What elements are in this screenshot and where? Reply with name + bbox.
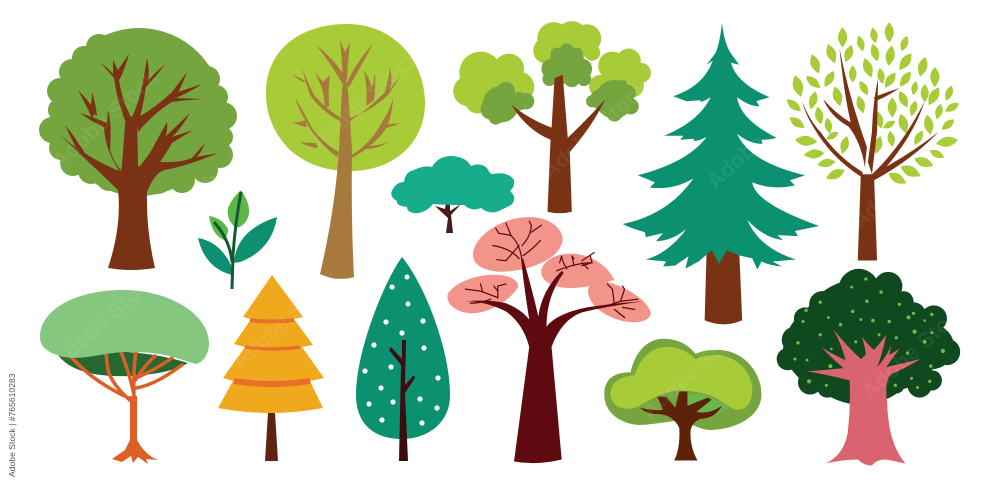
- icon: leafy sprig: [198, 190, 277, 289]
- shrub outer foliage: [604, 339, 761, 430]
- white dots: [362, 274, 441, 426]
- dark foliage: [481, 43, 639, 125]
- tree: teal bush tree: [391, 156, 514, 233]
- sprig leaves: [198, 190, 277, 275]
- golden foliage tiers: [218, 275, 324, 413]
- group: upper right trees, scaled: [453, 21, 961, 324]
- watermark text: Adobe Stock: [702, 85, 819, 194]
- acacia branches: [72, 352, 182, 464]
- shrub green hollow: [683, 394, 729, 415]
- teardrop trunk: [389, 340, 415, 461]
- tier bands: [234, 320, 310, 384]
- oak trunk and branches: [60, 54, 218, 270]
- oak canopy: [39, 28, 237, 196]
- tree: round lime tree: [266, 24, 425, 279]
- watermark text: Adobe Stock: [847, 125, 964, 234]
- shrub trunk: [640, 392, 722, 460]
- watermark text: Adobe Stock: [307, 45, 424, 154]
- tree: teal teardrop tree: [356, 257, 450, 461]
- dark foliage: [777, 269, 960, 405]
- watermark text: Adobe Stock: [537, 75, 654, 184]
- watermark text: Adobe Stock: [637, 315, 754, 424]
- lime dots: [793, 277, 945, 389]
- watermark text: [47, 45, 974, 424]
- tree: fir tree: [623, 23, 819, 324]
- blossom trunk and branches: [465, 259, 643, 463]
- shrub inner foliage: [610, 347, 752, 410]
- acacia underside: [58, 351, 188, 376]
- lime canopy: [266, 24, 425, 171]
- acacia canopy: [40, 290, 209, 364]
- blossom twigs: [465, 221, 638, 317]
- group: lower right trees, scaled: [447, 217, 960, 466]
- stock credit text: Adobe Stock | #765610283: [7, 373, 17, 477]
- tree: leafy sapling: [784, 22, 961, 260]
- watermark text: Adobe Stock: [227, 265, 344, 374]
- tree: dark green tree with pink trunk: [777, 269, 960, 466]
- tree: pink blossom tree: [447, 217, 651, 463]
- teardrop canopy: [356, 257, 450, 439]
- sapling leaves: [784, 22, 961, 187]
- tree: acacia with pale canopy: [40, 290, 209, 464]
- pink trunk: [807, 330, 921, 466]
- tree: scalloped green oak: [39, 28, 237, 270]
- sprig stem: [214, 192, 241, 289]
- watermark text: Adobe Stock: [167, 115, 284, 224]
- watermark text: Adobe Stock: [47, 265, 164, 374]
- fir foliage: [623, 23, 819, 270]
- teal foliage: [391, 156, 514, 213]
- lime tree trunk and branches: [292, 40, 400, 279]
- sapling trunk and branches: [802, 49, 939, 260]
- light foliage: [453, 21, 651, 113]
- teal tree trunk: [435, 202, 461, 233]
- pink canopies: [447, 217, 651, 322]
- golden trunk: [265, 413, 278, 461]
- fir trunk: [705, 248, 742, 324]
- watermark text: Adobe Stock: [47, 65, 164, 174]
- tree: three-cloud tree: [453, 21, 651, 213]
- tree: green shrub tree: [604, 339, 761, 460]
- watermark text: Adobe Stock: [857, 295, 974, 404]
- three-cloud trunk: [511, 75, 605, 213]
- tree: golden tiered conifer: [218, 275, 324, 461]
